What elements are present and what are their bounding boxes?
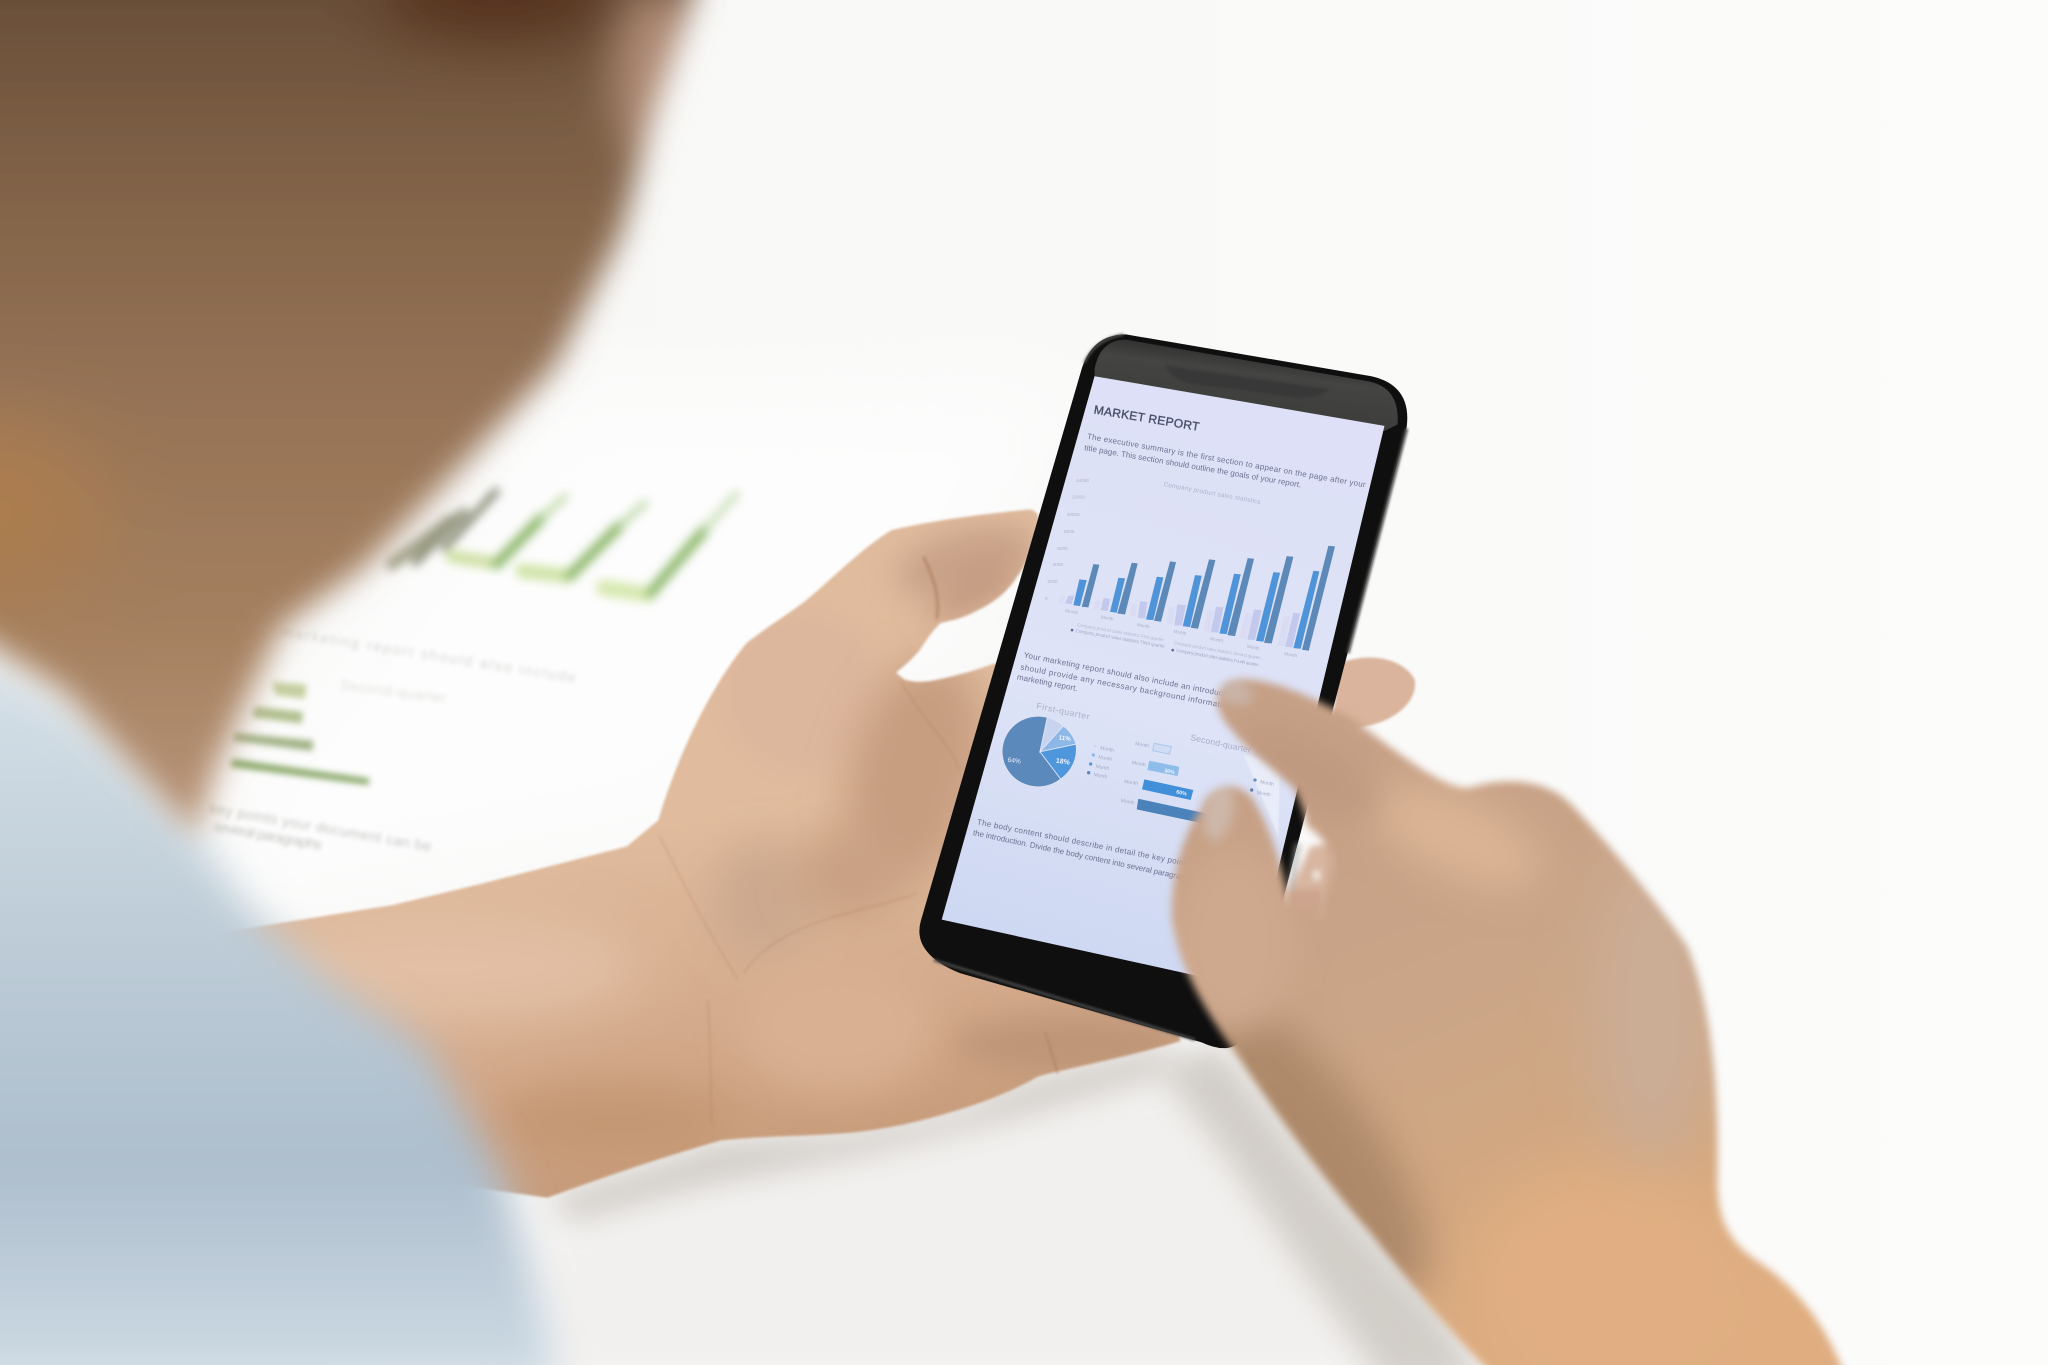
blurred paper text: several paragraphs xyxy=(212,819,323,854)
pie chart xyxy=(1002,716,1076,787)
chart category labels: Month xyxy=(1101,614,1115,622)
sales bar chart xyxy=(1058,546,1335,651)
second-quarter heading: Second-quarter xyxy=(1190,732,1252,755)
blurred paper text: marketing report should also include xyxy=(280,624,577,687)
blurred shirt shoulder xyxy=(0,627,562,1365)
second chart legend: Month xyxy=(1256,790,1271,798)
pie legend: Month xyxy=(1095,764,1110,772)
chart axis labels: 6000 xyxy=(1057,546,1068,551)
chart axis labels: 2000 xyxy=(1047,579,1058,584)
chart category labels: Month xyxy=(1284,651,1298,658)
phone rim highlights xyxy=(934,334,1407,1040)
pie legend: Month xyxy=(1100,745,1115,754)
phone body xyxy=(919,334,1407,1048)
pie legend: Month xyxy=(1098,754,1113,763)
blurred paper report on the table xyxy=(208,385,1071,921)
pie chart: 11% xyxy=(1058,734,1072,743)
chart axis labels: 12000 xyxy=(1072,494,1085,499)
horizontal bar chart: Month xyxy=(1124,779,1139,787)
marketing paragraph: should provide any necessary background information xyxy=(1020,663,1233,711)
chart legend: Company product sales statistics First quarter xyxy=(1077,622,1165,643)
second chart legend: Month xyxy=(1260,779,1275,788)
left arm and hand holding the phone xyxy=(131,496,1415,1228)
chart legend: Company product sales statistics Second quarter xyxy=(1173,640,1261,661)
chart category labels: Month xyxy=(1065,608,1079,615)
marketing paragraph: marketing report. xyxy=(1016,673,1079,693)
chart legend xyxy=(1071,622,1261,667)
screen reflection under finger xyxy=(1243,753,1280,837)
pie chart: 18% xyxy=(1055,758,1071,767)
chart axis labels xyxy=(1045,478,1089,601)
marketing paragraph: Your marketing report should also include an introduction xyxy=(1023,651,1237,701)
fingertip behind the phone xyxy=(1332,657,1415,734)
horizontal bar chart: Month xyxy=(1135,741,1150,749)
chart axis labels: 8000 xyxy=(1064,529,1075,534)
table shadow and tone xyxy=(536,1045,1489,1365)
pie legend xyxy=(1087,745,1115,780)
fingernails xyxy=(1217,678,1254,708)
second chart legend xyxy=(1250,778,1275,798)
top bezel xyxy=(1095,340,1398,431)
palm creases xyxy=(660,556,1058,1123)
blurred green bar chart xyxy=(392,491,737,594)
phone screen xyxy=(942,376,1384,988)
right hand touching the screen xyxy=(1149,653,1881,1365)
heading: market report: MARKET REPORT xyxy=(1093,403,1201,434)
blurred paper text: Second-quarter xyxy=(339,678,448,707)
horizontal bar chart: Month xyxy=(1131,760,1146,768)
chart legend: Company product sales statistics Third quarter xyxy=(1075,628,1166,649)
speaker notch xyxy=(1165,366,1330,398)
horizontal bar chart: 60% xyxy=(1176,789,1188,798)
screen content, lower part xyxy=(972,651,1280,884)
chart axis labels: 0 xyxy=(1045,596,1048,601)
chart category labels: Month xyxy=(1210,636,1224,643)
body paragraph: the introduction. Divide the body content into several paragraphs. xyxy=(972,828,1196,884)
intro paragraph: title page. This section should outline the goals of your report. xyxy=(1084,443,1302,490)
chart axis labels: 4000 xyxy=(1053,562,1063,567)
chart category labels: Month xyxy=(1173,629,1187,636)
blurred green horizontal bars xyxy=(230,682,370,785)
pie legend: Month xyxy=(1093,772,1108,780)
horizontal bar chart xyxy=(1120,741,1213,825)
pie chart heading: First-quarter xyxy=(1036,701,1091,722)
intro paragraph: The executive summary is the first section to appear on the page after your xyxy=(1086,432,1367,489)
chart category labels xyxy=(1065,608,1298,658)
chart title: Company product sales statistics xyxy=(1163,481,1261,506)
horizontal bar chart: Month xyxy=(1120,798,1135,806)
fingers and phone edge seen between the thumb and index finger xyxy=(1287,843,1335,920)
arm and palm shape xyxy=(238,508,1182,1200)
smartphone xyxy=(919,334,1407,1048)
paper sheet xyxy=(216,385,1071,921)
screen content, upper part xyxy=(1045,403,1367,667)
chart category labels: Month xyxy=(1247,644,1261,651)
horizontal bar chart: 30% xyxy=(1164,768,1176,776)
chart category labels: Month xyxy=(1137,622,1151,629)
blurred head xyxy=(0,0,731,862)
chart axis labels: 10000 xyxy=(1067,512,1080,517)
chart axis labels: 14000 xyxy=(1076,478,1089,483)
pie chart: 64% xyxy=(1007,757,1021,766)
body paragraph: The body content should describe in detail the key points of xyxy=(976,818,1201,871)
chart legend: Company product sales statistics Fourth quarter xyxy=(1176,648,1259,667)
blurred paper text xyxy=(208,624,577,855)
blurred paper text: key points your document can be xyxy=(208,801,432,855)
